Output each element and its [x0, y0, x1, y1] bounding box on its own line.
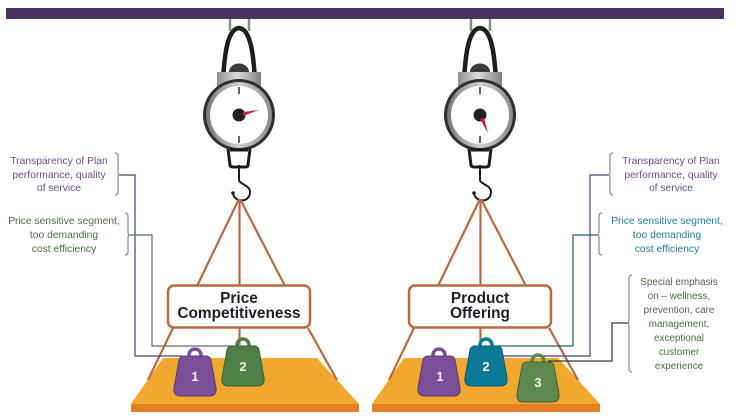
right platform — [372, 358, 600, 412]
right scale hook — [469, 149, 491, 200]
left price competitiveness box: Price — [220, 290, 258, 307]
right bracket 1 — [608, 153, 613, 195]
right product offering box — [409, 286, 551, 328]
right weight 1: 1 — [436, 369, 444, 384]
right product offering box: Offering — [450, 305, 510, 322]
right text: transparency: Transparency of Plan — [622, 156, 720, 167]
left text: transparency: of service — [37, 183, 81, 194]
left text: price sensitive: cost efficiency — [32, 244, 97, 255]
right weight 2 — [465, 339, 507, 386]
left weight 1: 1 — [191, 369, 199, 384]
right text: price sensitive: too demanding — [633, 230, 701, 241]
right connector lines — [495, 175, 629, 361]
right bracket 3 — [627, 275, 632, 372]
right text: price sensitive: cost efficiency — [635, 244, 700, 255]
left text: price sensitive: Price sensitive segment, — [8, 216, 120, 227]
right text: price sensitive: Price sensitive segment, — [611, 216, 723, 227]
left price competitiveness box — [168, 286, 310, 328]
right text: special emphasis: experience — [655, 361, 704, 372]
right scale dial — [444, 79, 516, 151]
right text: transparency: performance, quality — [624, 170, 718, 181]
left scale hook — [228, 149, 250, 200]
right product offering box: Product — [451, 290, 509, 307]
right text: special emphasis: exceptional — [654, 333, 704, 344]
right weight 3 — [517, 355, 559, 402]
left text: price sensitive — [8, 216, 120, 255]
left ropes — [148, 199, 337, 380]
right scale — [444, 19, 516, 200]
left text: transparency: performance, quality — [12, 170, 106, 181]
left weight 2 — [222, 339, 264, 386]
left scale — [203, 19, 275, 200]
right weight 2: 2 — [482, 359, 490, 374]
right text: special emphasis: customer — [659, 347, 700, 358]
right text: special emphasis: prevention, care — [644, 305, 715, 316]
right scale hanger — [458, 19, 502, 86]
right text: special emphasis: management, — [649, 319, 709, 330]
left bracket 1 — [115, 153, 120, 195]
right ropes — [389, 199, 578, 380]
left bracket 2 — [125, 213, 130, 255]
right weight 1 — [418, 349, 460, 396]
right text: special emphasis — [640, 277, 718, 372]
left price competitiveness box: Competitiveness — [177, 305, 301, 322]
left text: transparency — [10, 156, 108, 194]
left connector lines — [120, 175, 232, 356]
right bracket 2 — [597, 213, 602, 255]
left text: price sensitive: too demanding — [30, 230, 98, 241]
top beam — [6, 8, 724, 19]
right text: transparency — [622, 156, 720, 194]
right text: price sensitive — [611, 216, 723, 255]
right weight 3: 3 — [534, 375, 542, 390]
left text: transparency: Transparency of Plan — [10, 156, 108, 167]
left scale dial — [203, 79, 275, 151]
left platform — [131, 358, 359, 412]
right text: special emphasis: Special emphasis — [640, 277, 718, 288]
right text: transparency: of service — [649, 183, 693, 194]
left scale hanger — [217, 19, 261, 86]
left weight 1 — [174, 349, 216, 396]
right text: special emphasis: on – wellness, — [648, 291, 710, 302]
left weight 2: 2 — [239, 359, 247, 374]
